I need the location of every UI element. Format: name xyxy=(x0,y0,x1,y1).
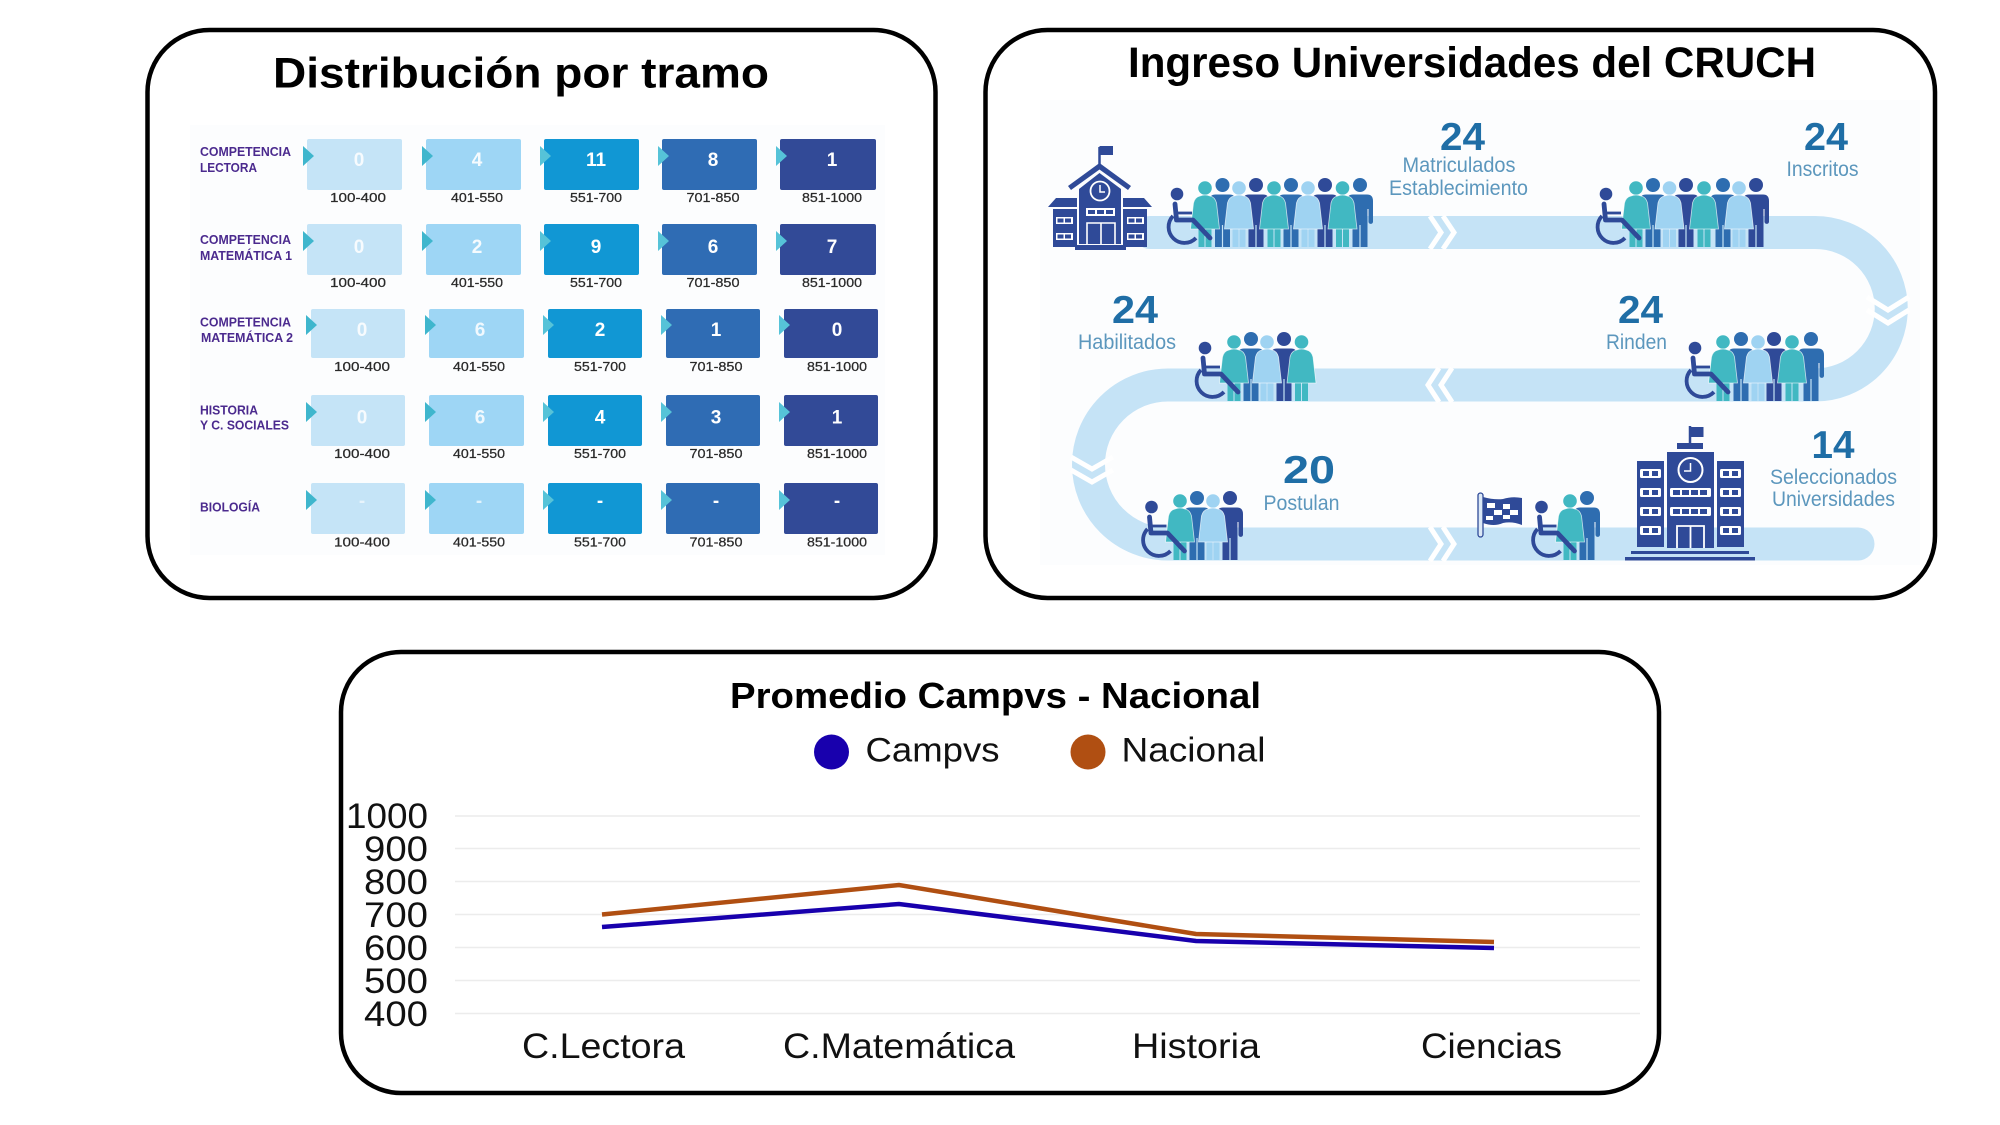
row: Competencia Matemática 2: 6 xyxy=(475,320,485,341)
icon: checkered flag xyxy=(1478,493,1522,537)
row: Competencia Matemática 2: 401-550 xyxy=(453,359,505,374)
figures: matriculados group xyxy=(1169,178,1373,247)
y axis labels xyxy=(346,797,428,1034)
row: Competencia Matemática 2: 100-400 xyxy=(334,359,390,374)
row: Biología: - xyxy=(359,491,365,512)
winding path road xyxy=(1088,232,1891,544)
grid image background xyxy=(190,125,885,555)
row: Competencia Lectora: 11 xyxy=(586,150,606,171)
stat: 24 habilitados: 24 xyxy=(1112,289,1158,332)
stat: 24 rinden xyxy=(1606,289,1667,354)
row: Historia y C. Sociales: 851-1000 xyxy=(807,446,867,461)
heading: Promedio Campvs - Nacional: Promedio Campvs - Nacional xyxy=(730,675,1261,716)
y axis labels: 1000 xyxy=(346,797,428,836)
stat: 24 habilitados: Habilitados xyxy=(1078,331,1176,354)
stat: 20 postulan: 20 xyxy=(1283,449,1335,492)
row: Competencia Matemática 1 xyxy=(200,224,876,290)
y axis labels: 400 xyxy=(364,995,428,1034)
row: Historia y C. Sociales: 701-850 xyxy=(690,446,742,461)
row: Competencia Lectora: COMPETENCIA xyxy=(200,144,292,159)
row: Biología: 701-850 xyxy=(690,534,742,550)
stat: 14 seleccionados universidades: Universidades xyxy=(1772,488,1895,511)
row: Competencia Matemática 1: 9 xyxy=(591,237,601,258)
figures: seleccionados group xyxy=(1533,491,1600,560)
row: Competencia Matemática 2: COMPETENCIA xyxy=(200,314,292,330)
row: Historia y C. Sociales: Y C. SOCIALES xyxy=(200,418,289,432)
stat: 24 inscritos xyxy=(1786,116,1858,181)
row: Competencia Matemática 2: 1 xyxy=(711,320,722,341)
row: Competencia Matemática 1: 6 xyxy=(708,237,718,258)
row: Competencia Matemática 2: MATEMÁTICA 2 xyxy=(201,330,293,345)
row: Competencia Matemática 2: 0 xyxy=(832,320,842,341)
row: Competencia Matemática 2: 0 xyxy=(357,320,367,341)
y axis labels: 900 xyxy=(364,830,428,869)
stat: 20 postulan: Postulan xyxy=(1264,492,1340,515)
figures: postulan group xyxy=(1143,491,1243,560)
row: Competencia Matemática 2: 551-700 xyxy=(574,359,626,374)
icon: university building xyxy=(1625,426,1755,560)
heading: Distribución por tramo: Distribución por tramo xyxy=(273,50,769,98)
row: Competencia Matemática 1: 401-550 xyxy=(451,275,503,290)
row: Competencia Matemática 1: 100-400 xyxy=(330,275,386,290)
row: Historia y C. Sociales xyxy=(200,395,878,461)
stat: 24 rinden: 24 xyxy=(1618,289,1663,332)
stat: 24 habilitados xyxy=(1078,289,1176,354)
row: Competencia Lectora: 4 xyxy=(472,150,483,171)
stat: 24 inscritos: Inscritos xyxy=(1786,158,1858,181)
row: Competencia Lectora: 401-550 xyxy=(451,190,503,205)
figures: inscritos group xyxy=(1598,178,1769,247)
row: Historia y C. Sociales: 100-400 xyxy=(334,446,390,461)
y axis labels: 700 xyxy=(364,896,428,935)
figures: habilitados group xyxy=(1197,332,1316,401)
row: Biología: - xyxy=(476,491,482,512)
stat: 24 inscritos: 24 xyxy=(1804,116,1848,159)
figures: rinden group xyxy=(1687,332,1824,401)
y axis labels: 800 xyxy=(364,863,428,902)
row: Competencia Matemática 1: 851-1000 xyxy=(802,275,862,290)
row: Competencia Matemática 1: 551-700 xyxy=(570,275,622,290)
row: Competencia Matemática 2 xyxy=(200,309,878,374)
row: Historia y C. Sociales: 0 xyxy=(357,408,367,428)
row: Biología: 551-700 xyxy=(574,534,626,550)
row: Biología: 100-400 xyxy=(334,534,390,550)
row: Biología: - xyxy=(834,491,840,512)
panel: Distribución por tramo xyxy=(148,30,936,598)
y axis labels: 600 xyxy=(364,929,428,968)
row: Competencia Lectora xyxy=(200,139,876,205)
heading: Ingreso Universidades del CRUCH: Ingreso Universidades del CRUCH xyxy=(1128,39,1816,87)
row: Competencia Matemática 2: 701-850 xyxy=(690,359,742,374)
row: Historia y C. Sociales: 401-550 xyxy=(453,446,505,461)
row: Biología xyxy=(200,483,878,550)
y axis labels: 500 xyxy=(364,962,428,1001)
row: Competencia Matemática 1: 2 xyxy=(472,237,482,258)
stat: 14 seleccionados universidades: Seleccionados xyxy=(1770,466,1897,489)
row: Historia y C. Sociales: 6 xyxy=(475,408,485,428)
row: Historia y C. Sociales: 4 xyxy=(595,408,606,428)
row: Competencia Lectora: 701-850 xyxy=(686,190,740,205)
x axis labels: Historia xyxy=(1132,1027,1261,1066)
x axis labels: C.Lectora xyxy=(522,1027,686,1066)
legend xyxy=(814,732,1266,770)
icon: school xyxy=(1048,146,1152,250)
row: Competencia Lectora: LECTORA xyxy=(200,160,258,175)
series: Nacional xyxy=(602,885,1494,942)
stat: 24 matriculados establecimiento: 24 xyxy=(1440,116,1485,159)
row: Competencia Matemática 1: 0 xyxy=(354,237,364,258)
row: Historia y C. Sociales: 1 xyxy=(832,408,843,428)
row: Competencia Matemática 2: 851-1000 xyxy=(807,359,867,374)
stat: 24 matriculados establecimiento xyxy=(1389,116,1528,200)
stat: 20 postulan xyxy=(1264,449,1340,515)
row: Competencia Lectora: 0 xyxy=(354,150,364,171)
x axis labels: C.Matemática xyxy=(783,1027,1016,1066)
row: Competencia Lectora: 551-700 xyxy=(570,190,622,205)
row: Competencia Lectora: 100-400 xyxy=(330,190,386,205)
panel: Promedio Campvs - Nacional xyxy=(341,652,1659,1093)
stat: 24 matriculados establecimiento: Matriculados xyxy=(1402,154,1516,177)
diagram image background xyxy=(1040,100,1920,565)
row: Biología: 401-550 xyxy=(453,534,505,550)
stat: 14 seleccionados universidades: 14 xyxy=(1812,424,1855,467)
stat: 14 seleccionados universidades xyxy=(1770,424,1897,511)
row: Biología: - xyxy=(713,491,719,512)
row: Competencia Lectora: 851-1000 xyxy=(802,190,862,205)
stat: 24 matriculados establecimiento: Establecimiento xyxy=(1389,177,1528,200)
x axis labels: Ciencias xyxy=(1421,1027,1562,1066)
legend: Nacional xyxy=(1122,732,1266,770)
path chevrons xyxy=(1071,216,1909,561)
row: Competencia Lectora: 1 xyxy=(827,150,838,171)
row: Competencia Matemática 1: 7 xyxy=(827,237,837,258)
line chart xyxy=(346,797,1640,1066)
row: Competencia Matemática 2: 2 xyxy=(595,320,605,341)
legend: Campvs xyxy=(866,732,1000,770)
stat: 24 rinden: Rinden xyxy=(1606,331,1667,354)
row: Competencia Matemática 1: 701-850 xyxy=(686,275,740,290)
row: Competencia Matemática 1: MATEMÁTICA 1 xyxy=(200,248,292,263)
x axis labels xyxy=(522,1027,1562,1066)
row: Competencia Lectora: 8 xyxy=(708,150,718,171)
row: Competencia Matemática 1: COMPETENCIA xyxy=(200,232,292,247)
series: Campvs xyxy=(602,904,1494,948)
row: Biología: - xyxy=(597,491,603,512)
row: Historia y C. Sociales: 551-700 xyxy=(574,446,626,461)
row: Biología: 851-1000 xyxy=(807,534,867,550)
row: Historia y C. Sociales: 3 xyxy=(711,408,721,428)
panel: Ingreso Universidades del CRUCH xyxy=(986,30,1935,598)
row: Biología: BIOLOGÍA xyxy=(200,500,261,514)
row: Historia y C. Sociales: HISTORIA xyxy=(200,402,259,418)
